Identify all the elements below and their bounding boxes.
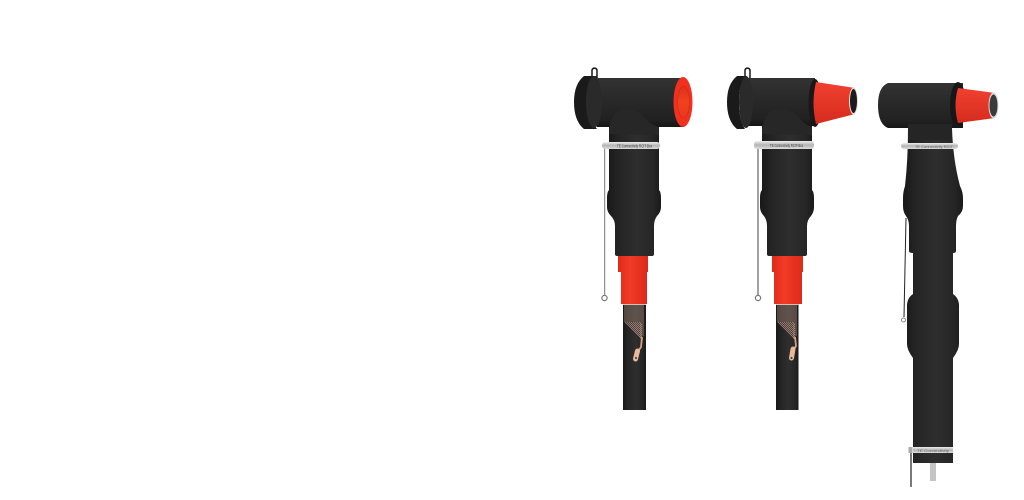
- hanger loop: [745, 68, 750, 78]
- red open end: [674, 77, 692, 127]
- drain wire with ring: [755, 148, 761, 301]
- T junction shoulder: [609, 109, 659, 135]
- upper clamp band: [901, 143, 958, 149]
- T junction shoulder: [762, 109, 812, 135]
- cone opening: [988, 92, 998, 118]
- red cone: [814, 82, 855, 124]
- connector 3: long black connector: [878, 82, 998, 487]
- lower cable: [776, 300, 798, 410]
- lower clamp band: TE Connectivity: [917, 448, 949, 453]
- clamp band: TE Connectivity RCIT-Bxx: [617, 143, 653, 148]
- red sleeve: [772, 256, 803, 304]
- red sleeve: [618, 256, 648, 304]
- rear cap: [727, 76, 745, 129]
- horizontal body: [597, 78, 684, 127]
- connector 1: red open-end T connector: [574, 68, 692, 410]
- lower lug: [908, 447, 912, 453]
- drain wire with ring: [902, 218, 906, 322]
- connector 2: red cone T connector: [727, 68, 858, 410]
- stem and bulge: [607, 112, 661, 256]
- T junction fill: [908, 124, 952, 140]
- copper braid and lug: [776, 304, 799, 359]
- stem and bulge: [760, 112, 814, 256]
- lower clamp band: [913, 447, 953, 453]
- rear cap: [574, 76, 597, 129]
- drain wire with ring: [602, 148, 607, 301]
- horizontal body: [745, 78, 815, 126]
- clamp band: TE Connectivity RCIT-Bxx: [770, 143, 804, 148]
- dark collar: [950, 82, 966, 128]
- cone opening: [849, 88, 858, 114]
- dark collar: [808, 79, 822, 127]
- upper clamp band: TE Connectivity RCIT: [915, 144, 954, 149]
- horizontal body: [878, 83, 963, 128]
- clamp band: [602, 142, 660, 149]
- clamp band: [754, 141, 814, 149]
- hanger loop: [592, 68, 597, 78]
- copper braid and lug: [623, 304, 646, 359]
- red cone: [956, 88, 995, 123]
- long body sections: [903, 128, 963, 463]
- lower wire: [910, 453, 912, 487]
- metal pin: [930, 463, 936, 481]
- lower cable: [623, 300, 646, 410]
